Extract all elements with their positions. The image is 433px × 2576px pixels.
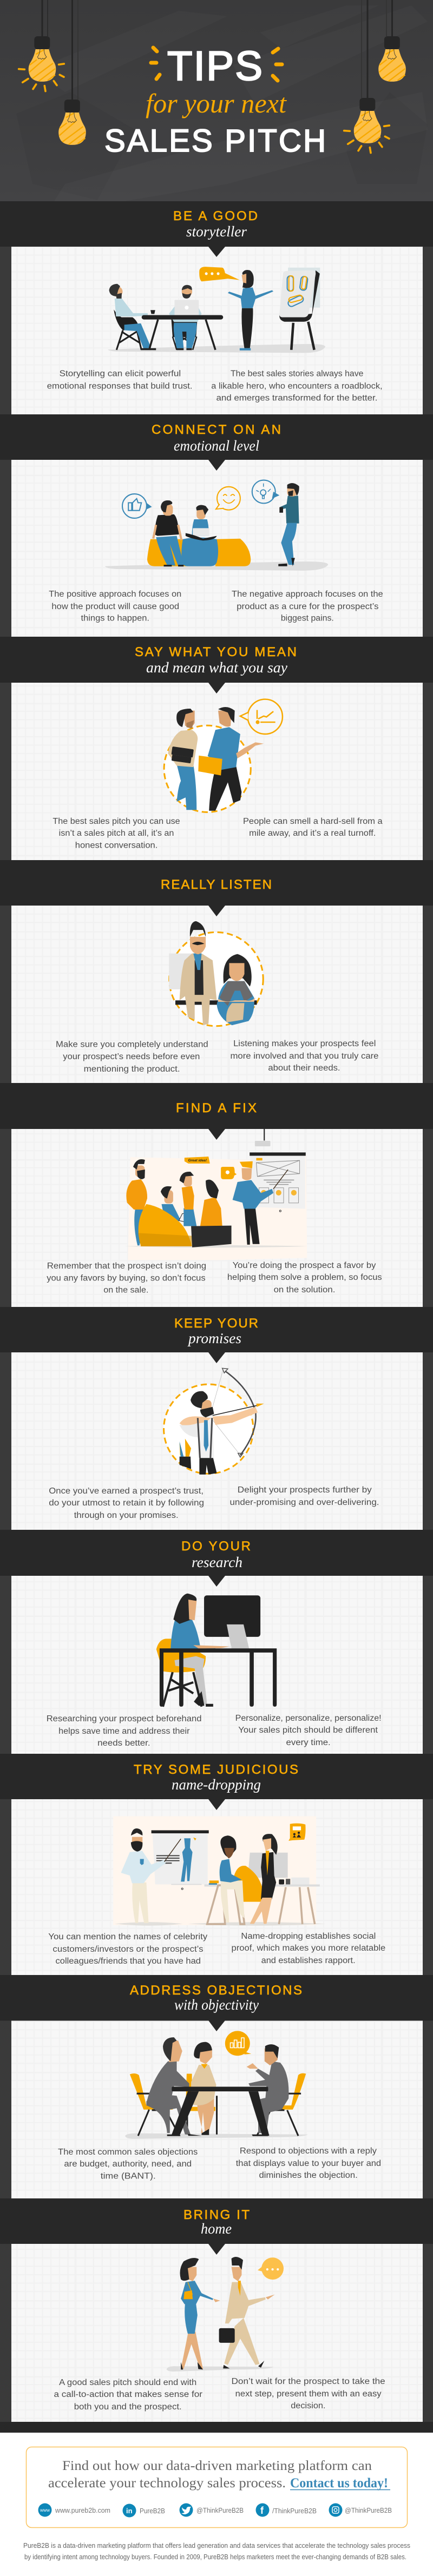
illustration: woman researching at desk: [156, 1594, 277, 1707]
lightbulb second right: [344, 0, 389, 153]
sparks around title: [151, 48, 282, 81]
heading 3: [135, 645, 297, 676]
text: really listen: more involved and that you truly care: [231, 1052, 379, 1061]
heading 7: DO YOUR: [181, 1539, 251, 1554]
illustration: archer in dashed circle: [164, 1368, 264, 1475]
text: bring it home: both you and the prospect.: [74, 2402, 182, 2412]
text: find a fix: [47, 1261, 382, 1295]
illustration: man and woman listening in dashed circle: [169, 921, 263, 1026]
title: for your next: [146, 88, 287, 118]
text: connect on an emotional level: The positive approach focuses on: [49, 590, 181, 599]
text: find a fix: You’re doing the prospect a favor by: [233, 1261, 376, 1270]
heading 7: research: [192, 1554, 242, 1570]
heading 9: [130, 1983, 302, 2013]
illustration: man and woman walking: [167, 2257, 284, 2372]
social links: [38, 2504, 392, 2518]
social links: PureB2B: [140, 2507, 165, 2515]
text: keep your promises: Once you’ve earned a prospect’s trust,: [49, 1487, 204, 1496]
call to action box: Contact us today!: [290, 2476, 388, 2491]
text: try some judicious name-dropping: and establishes rapport.: [261, 1956, 356, 1965]
text: say what you mean: [53, 817, 383, 850]
social links: /ThinkPureB2B: [272, 2507, 317, 2515]
text: bring it home: next step, present them with an easy: [235, 2389, 382, 2399]
illustration: name-dropping presentation: [113, 1816, 326, 1926]
text: say what you mean: honest conversation.: [75, 841, 158, 850]
lightbulb top right: [378, 0, 406, 82]
heading 8: name-dropping: [172, 1776, 261, 1793]
heading 10: home: [201, 2221, 232, 2237]
header background: [0, 0, 433, 201]
text: be a good storyteller: [47, 369, 383, 403]
text: find a fix: on the sale.: [103, 1286, 148, 1295]
heading 8: [134, 1762, 298, 1793]
text: try some judicious name-dropping: customers/investors or the prospect’s: [53, 1945, 204, 1954]
text: address objections: that displays value to your buyer and: [236, 2159, 381, 2168]
text: do your research: Researching your prospect beforehand: [47, 1714, 201, 1723]
text: try some judicious name-dropping: [48, 1932, 385, 1966]
text: bring it home: decision.: [291, 2401, 326, 2410]
text: try some judicious name-dropping: colleagues/friends that you have had: [56, 1957, 201, 1966]
text: be a good storyteller: The best sales stories always have: [231, 369, 364, 379]
heading 10: BRING IT: [183, 2208, 250, 2222]
heading 1: BE A GOOD: [173, 209, 258, 223]
text: address objections: diminishes the objection.: [259, 2171, 358, 2180]
text: be a good storyteller: emotional responses that build trust.: [47, 382, 193, 391]
illustration: two people talking in dashed circle: [164, 699, 283, 812]
call to action box: Find out how our data-driven marketing platform can: [62, 2459, 372, 2473]
social links: @ThinkPureB2B: [196, 2506, 244, 2514]
call to action box: accelerate your technology sales process.: [48, 2476, 286, 2491]
heading 2: [152, 422, 281, 454]
text: say what you mean: People can smell a hard-sell from a: [243, 817, 383, 826]
text: say what you mean: The best sales pitch you can use: [53, 817, 180, 826]
heading 6: [174, 1316, 258, 1346]
text: try some judicious name-dropping: proof, which makes you more relatable: [232, 1944, 385, 1953]
text: address objections: [58, 2146, 381, 2181]
text: be a good storyteller: a likable hero, who encounters a roadblock,: [211, 382, 383, 391]
title: TIPS: [167, 43, 263, 89]
text: keep your promises: [49, 1485, 379, 1520]
heading 10: [183, 2208, 250, 2237]
text: really listen: Listening makes your prospects feel: [233, 1039, 376, 1048]
text: do your research: helps save time and address their: [58, 1727, 190, 1736]
text: really listen: your prospect’s needs before even: [63, 1052, 200, 1061]
heading 2: emotional level: [174, 438, 259, 454]
social links: www.pureb2b.com: [55, 2506, 110, 2514]
text: do your research: Your sales pitch should be different: [238, 1726, 378, 1735]
pointer triangles: [208, 247, 225, 2255]
heading 6: promises: [187, 1330, 241, 1346]
text: connect on an emotional level: product as a cure for the prospect’s: [237, 602, 379, 611]
call to action box: [26, 2447, 407, 2527]
text: do your research: [47, 1714, 382, 1748]
social links: @ThinkPureB2B: [345, 2506, 392, 2514]
text: connect on an emotional level: things to happen.: [81, 614, 149, 623]
text: find a fix: you any favors by buying, so don’t focus: [47, 1274, 206, 1283]
heading 1: [173, 209, 258, 240]
text: find a fix: helping them solve a problem, so focus: [227, 1273, 382, 1282]
heading 9: with objectivity: [174, 1997, 259, 2013]
text: keep your promises: do your utmost to retain it by following: [49, 1498, 204, 1508]
text: bring it home: Don’t wait for the prospect to take the: [232, 2377, 385, 2386]
social links: www: [40, 2508, 50, 2513]
heading 7: [181, 1539, 251, 1570]
illustration: team presentation: Great idea!: [188, 1159, 207, 1162]
text: do your research: every time.: [286, 1738, 331, 1747]
text: keep your promises: through on your promises.: [74, 1511, 179, 1520]
text: connect on an emotional level: how the product will cause good: [51, 602, 179, 611]
social links: f: [260, 2505, 264, 2516]
text: find a fix: Remember that the prospect isn’t doing: [47, 1261, 206, 1271]
illustration: team presentation: [124, 1129, 308, 1260]
lightbulb top left: [19, 0, 64, 91]
heading 2: CONNECT ON AN: [152, 422, 281, 437]
text: bring it home: a call-to-action that makes sense for: [54, 2390, 202, 2399]
text: try some judicious name-dropping: Name-dropping establishes social: [241, 1932, 376, 1941]
heading 9: ADDRESS OBJECTIONS: [130, 1983, 302, 1998]
text: really listen: about their needs.: [268, 1064, 340, 1073]
illustration: beanbag conversation: [105, 480, 328, 571]
title: SALES PITCH: [104, 123, 326, 158]
text: keep your promises: Delight your prospects further by: [238, 1485, 372, 1495]
text: address objections: Respond to objections with a reply: [240, 2146, 377, 2156]
text: address objections: are budget, authority, need, and: [64, 2159, 192, 2169]
illustration: storytelling meeting: [108, 267, 325, 353]
heading 8: TRY SOME JUDICIOUS: [134, 1762, 298, 1777]
text: address objections: The most common sales objections: [58, 2148, 198, 2157]
text: say what you mean: mile away, and it’s a real turnoff.: [249, 829, 376, 838]
heading 1: storyteller: [186, 223, 247, 240]
heading 4: REALLY LISTEN: [161, 877, 272, 892]
text: find a fix: on the solution.: [274, 1285, 335, 1294]
text: be a good storyteller: Storytelling can elicit powerful: [60, 369, 181, 379]
text: say what you mean: isn’t a sales pitch at all, it’s an: [59, 829, 174, 838]
heading 5: FIND A FIX: [176, 1101, 257, 1115]
social links: in: [126, 2507, 133, 2515]
footer description: [23, 2541, 410, 2561]
footer description: PureB2B is a data-driven marketing platform that offers lead generation and data services that accelerate the technology sales process: [23, 2541, 410, 2549]
text: connect on an emotional level: biggest pains.: [281, 614, 334, 623]
text: really listen: Make sure you completely understand: [56, 1040, 208, 1049]
heading 3: SAY WHAT YOU MEAN: [135, 645, 297, 659]
text: connect on an emotional level: The negative approach focuses on the: [232, 590, 383, 599]
text: bring it home: [54, 2377, 385, 2412]
text: really listen: [56, 1039, 379, 1074]
text: really listen: mentioning the product.: [84, 1065, 180, 1074]
title: [104, 43, 326, 158]
illustration: table meeting: [125, 2031, 308, 2139]
text: keep your promises: under-promising and over-delivering.: [229, 1498, 379, 1507]
text: try some judicious name-dropping: You can mention the names of celebrity: [48, 1932, 207, 1941]
text: connect on an emotional level: [49, 590, 383, 623]
text: do your research: needs better.: [97, 1739, 150, 1748]
heading 3: and mean what you say: [146, 659, 287, 676]
text: address objections: time (BANT).: [101, 2171, 156, 2181]
text: be a good storyteller: and emerges transformed for the better.: [216, 394, 377, 403]
text: do your research: Personalize, personalize, personalize!: [235, 1714, 382, 1723]
heading 6: KEEP YOUR: [174, 1316, 258, 1331]
lightbulb second left: [58, 0, 86, 145]
text: bring it home: A good sales pitch should end with: [59, 2378, 196, 2387]
